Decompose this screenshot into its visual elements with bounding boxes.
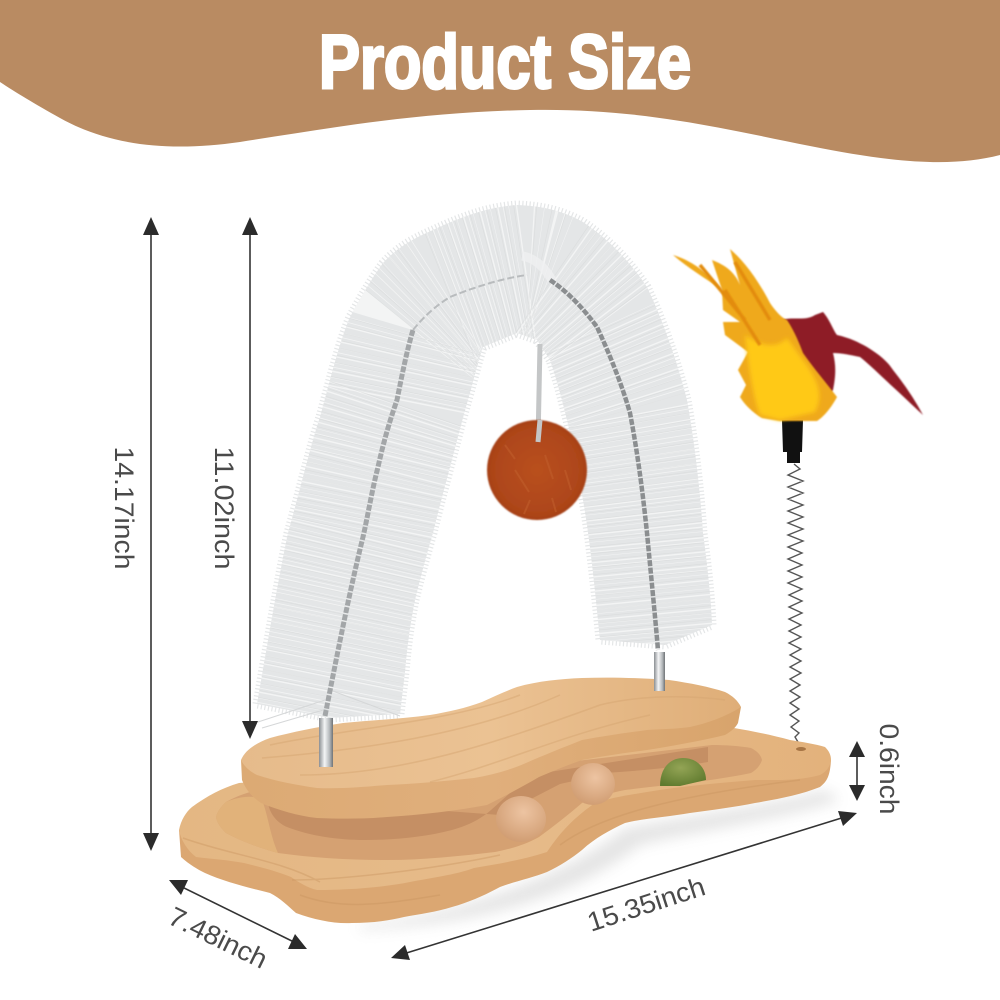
- red feathers: [775, 312, 923, 415]
- dimension: total height: [109, 217, 159, 851]
- dimension: width: [164, 880, 307, 975]
- dimension: brush height: 11.02inch: [209, 446, 239, 570]
- tray grain: [183, 780, 800, 904]
- right metal post: [654, 652, 665, 691]
- board side: [241, 707, 741, 819]
- brush body: [257, 205, 712, 718]
- yellow feathers bright: [745, 335, 819, 420]
- brush fuzzy edge: [257, 205, 712, 718]
- board top face: [241, 678, 741, 788]
- tray shadow: [360, 790, 840, 930]
- title: Product Size: [319, 20, 691, 105]
- feather toy: [673, 249, 923, 742]
- wood ball left: [496, 796, 546, 842]
- yellow feathers back: [673, 249, 837, 421]
- brush stray strands: [258, 690, 400, 728]
- brush light crossover: [522, 256, 552, 280]
- dimension: total height: 14.17inch: [109, 446, 139, 570]
- header banner: [0, 0, 1000, 162]
- tray groove: [216, 745, 762, 860]
- dimension: board thickness: 0.6inch: [874, 724, 904, 814]
- toy holder: [782, 420, 803, 463]
- dimension: length: [391, 811, 857, 960]
- right wire: [550, 280, 658, 650]
- spring hole: [796, 747, 806, 751]
- left metal post: [319, 718, 333, 767]
- top wire: [413, 275, 527, 330]
- pom ball: [487, 420, 587, 520]
- middle disc: [268, 747, 708, 840]
- lower wooden tray: [179, 728, 831, 923]
- catnip ball: [660, 758, 706, 786]
- arch brush: [257, 205, 712, 728]
- dimension: length: 15.35inch: [584, 871, 709, 938]
- tray side: [179, 760, 831, 923]
- groove shade left: [216, 797, 278, 853]
- wood ball right: [571, 763, 615, 805]
- tray top face: [179, 728, 831, 890]
- dimension: brush height: [209, 217, 258, 739]
- feather orange streaks: [700, 262, 770, 345]
- pom string: [538, 344, 540, 442]
- dimension: width: 7.48inch: [164, 901, 272, 975]
- spring: [788, 464, 803, 742]
- bristle streaks: [325, 275, 658, 716]
- board grain: [262, 695, 725, 782]
- dimension: board thickness: [849, 724, 904, 814]
- upper wooden board: [241, 678, 741, 819]
- left wire: [325, 330, 413, 716]
